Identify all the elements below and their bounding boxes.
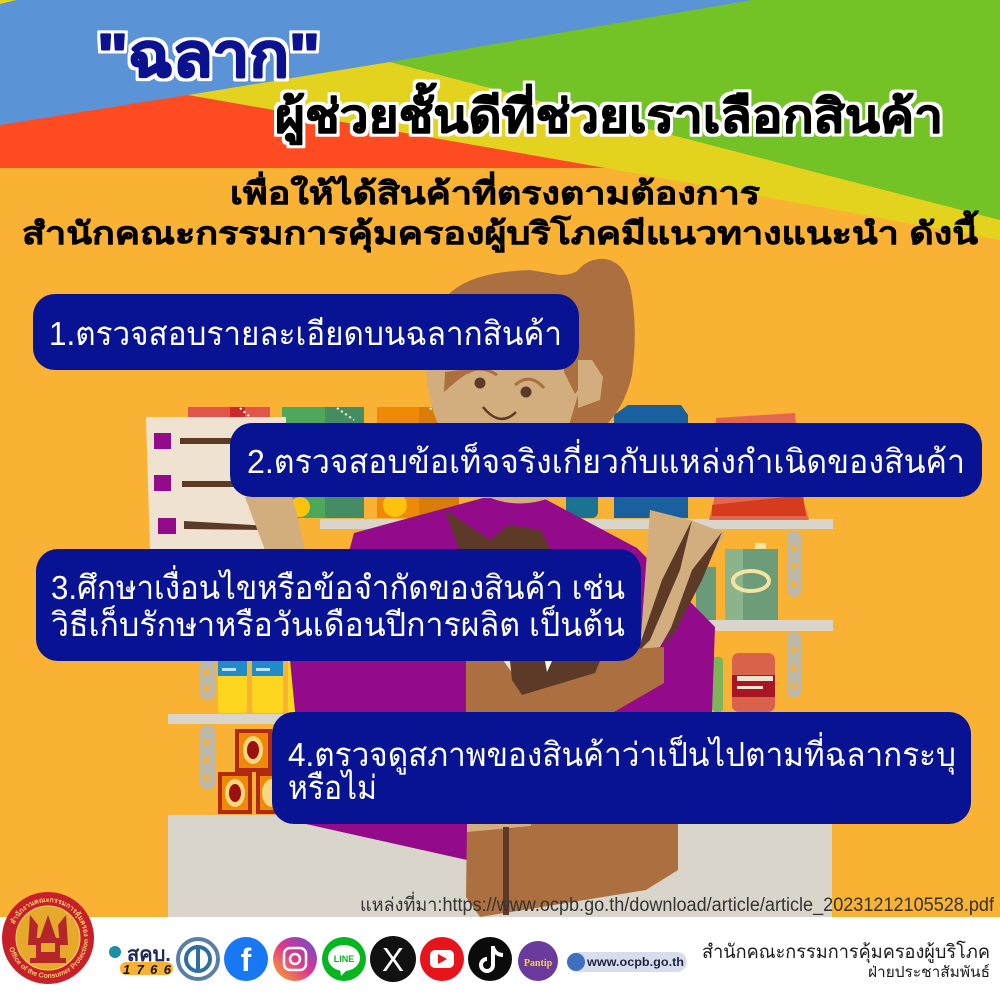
icon: hotline 1766: [109, 944, 173, 977]
panel: step 2: 2.ตรวจสอบข้อเท็จจริงเกี่ยวกับแหล่งกำเนิดของสินค้า: [247, 439, 965, 480]
heading: purpose: [22, 171, 979, 253]
illustration: shop shelves and products: [168, 405, 833, 917]
panel: step 2: [230, 423, 982, 497]
panel: step 1: [33, 294, 579, 370]
title: label: "ฉลาก": [97, 22, 320, 89]
icon: X: X: [382, 941, 404, 978]
icon: LINE: LINE: [334, 954, 354, 964]
panel: step 3: วิธีเก็บรักษาหรือวันเดือนปีการผลิต เป็นต้น: [51, 605, 625, 643]
icon: consumer protection board seal: [2, 892, 94, 984]
heading: purpose: เพื่อให้ได้สินค้าที่ตรงตามต้องการ: [230, 171, 760, 211]
subtitle: ผู้ช่วยชั้นดีที่ช่วยเราเลือกสินค้า: [275, 82, 943, 145]
panel: step 4: หรือไม่: [288, 769, 377, 806]
heading: purpose: สำนักคณะกรรมการคุ้มครองผู้บริโภคมีแนวทางแนะนำ ดังนี้: [22, 210, 979, 253]
icon: LINE: [322, 937, 366, 981]
icon: YouTube: [420, 937, 464, 981]
panel: step 1: 1.ตรวจสอบรายละเอียดบนฉลากสินค้า: [49, 315, 562, 352]
website pill: [567, 952, 687, 972]
panel: step 3: [36, 549, 641, 661]
icon: facebook: f: [241, 942, 252, 978]
website pill: www.ocpb.go.th: [586, 955, 684, 969]
icon: TikTok: [468, 937, 512, 981]
icon: Pantip: Pantip: [524, 958, 553, 969]
icon: hotline 1766: 1766: [123, 962, 172, 977]
icon: Pantip: [518, 941, 558, 981]
icon: X: [370, 936, 416, 982]
icon: instagram: [273, 937, 317, 981]
icon: hotline 1766: สคบ.: [127, 944, 171, 966]
icon: OCPB logo: [178, 939, 218, 979]
organisation name: สำนักคณะกรรมการคุ้มครองผู้บริโภค: [702, 940, 990, 964]
footer band: [0, 917, 1000, 1000]
icon: facebook: [224, 937, 268, 981]
panel: step 3: 3.ศึกษาเงื่อนไขหรือข้อจำกัดของสินค้า เช่น: [51, 565, 625, 606]
panel: step 4: [272, 712, 971, 824]
organisation name: [702, 940, 990, 981]
illustration: shopper with bag and checklist: [146, 259, 725, 917]
panel: step 4: 4.ตรวจดูสภาพของสินค้าว่าเป็นไปตามที่ฉลากระบุ: [288, 732, 956, 775]
organisation name: ฝ่ายประชาสัมพันธ์: [868, 964, 990, 981]
